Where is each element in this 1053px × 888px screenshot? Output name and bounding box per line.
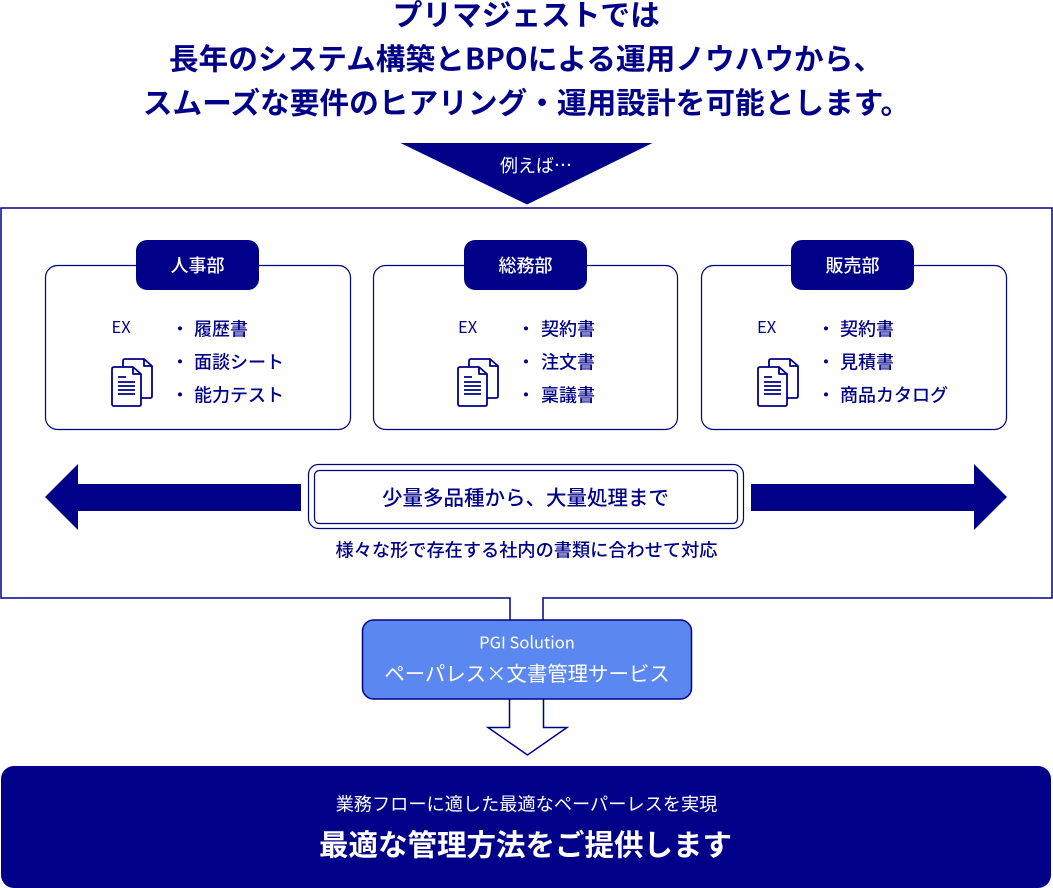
panel: 販売部: 見積書: [840, 348, 894, 374]
panel: 販売部: 商品カタログ: [840, 382, 948, 408]
panel: result: 業務フローに適した最適なペーパーレスを実現: [336, 790, 717, 816]
callout: 少量多品種: 少量多品種から、大量処理まで: [382, 481, 669, 511]
panel: 人事部: ・: [171, 382, 189, 408]
panel: 人事部: ・: [171, 316, 189, 342]
panel: 総務部: [374, 240, 678, 430]
panel: 総務部: ・: [517, 382, 535, 408]
panel: 総務部: ・: [517, 316, 535, 342]
panel: 販売部: ・: [817, 316, 835, 342]
panel: 人事部: ・: [171, 348, 189, 374]
arrow: right: [751, 464, 1007, 530]
caption: 様々な形で存在する社内の書類に合わせて対応: [336, 536, 717, 562]
panel: 人事部: [46, 240, 350, 430]
callout: 少量多品種: [308, 464, 744, 528]
panel: 人事部: 履歴書: [194, 316, 248, 342]
panel: 総務部: 契約書: [541, 316, 595, 342]
panel: 人事部: 能力テスト: [194, 382, 284, 408]
panel: 販売部: EX: [757, 314, 777, 338]
banner arrow: 例えば…: 例えば…: [500, 152, 572, 178]
panel: 販売部: ・: [817, 382, 835, 408]
panel: examples frame: [1, 208, 1052, 620]
panel: 販売部: 販売部: [826, 252, 880, 278]
panel: PGI Solution: ペーパレス×文書管理サービス: [384, 657, 670, 687]
heading: スムーズな要件のヒアリング・運用設計を可能とします。: [143, 80, 910, 122]
panel: 販売部: [702, 240, 1006, 430]
panel: 人事部: 面談シート: [194, 348, 284, 374]
panel: 総務部: 総務部: [498, 252, 552, 278]
panel: 販売部: ・: [817, 348, 835, 374]
panel: 総務部: ・: [517, 348, 535, 374]
banner arrow: 例えば…: [400, 143, 652, 204]
panel: 総務部: 注文書: [541, 348, 595, 374]
heading: [143, 0, 910, 122]
panel: 人事部: EX: [112, 314, 131, 338]
panel: PGI Solution: [362, 620, 692, 699]
arrow: left: [45, 464, 301, 530]
arrow: down to result: [488, 698, 567, 755]
heading: 長年のシステム構築とBPOによる運用ノウハウから、: [169, 36, 883, 78]
panel: 総務部: 稟議書: [541, 382, 595, 408]
panel: result: 最適な管理方法をご提供します: [319, 822, 732, 864]
panel: 販売部: 契約書: [840, 316, 894, 342]
panel: PGI Solution: PGI Solution: [479, 630, 575, 654]
panel: 人事部: 人事部: [170, 252, 224, 278]
panel: result: [1, 766, 1051, 888]
panel: 総務部: EX: [458, 314, 478, 338]
